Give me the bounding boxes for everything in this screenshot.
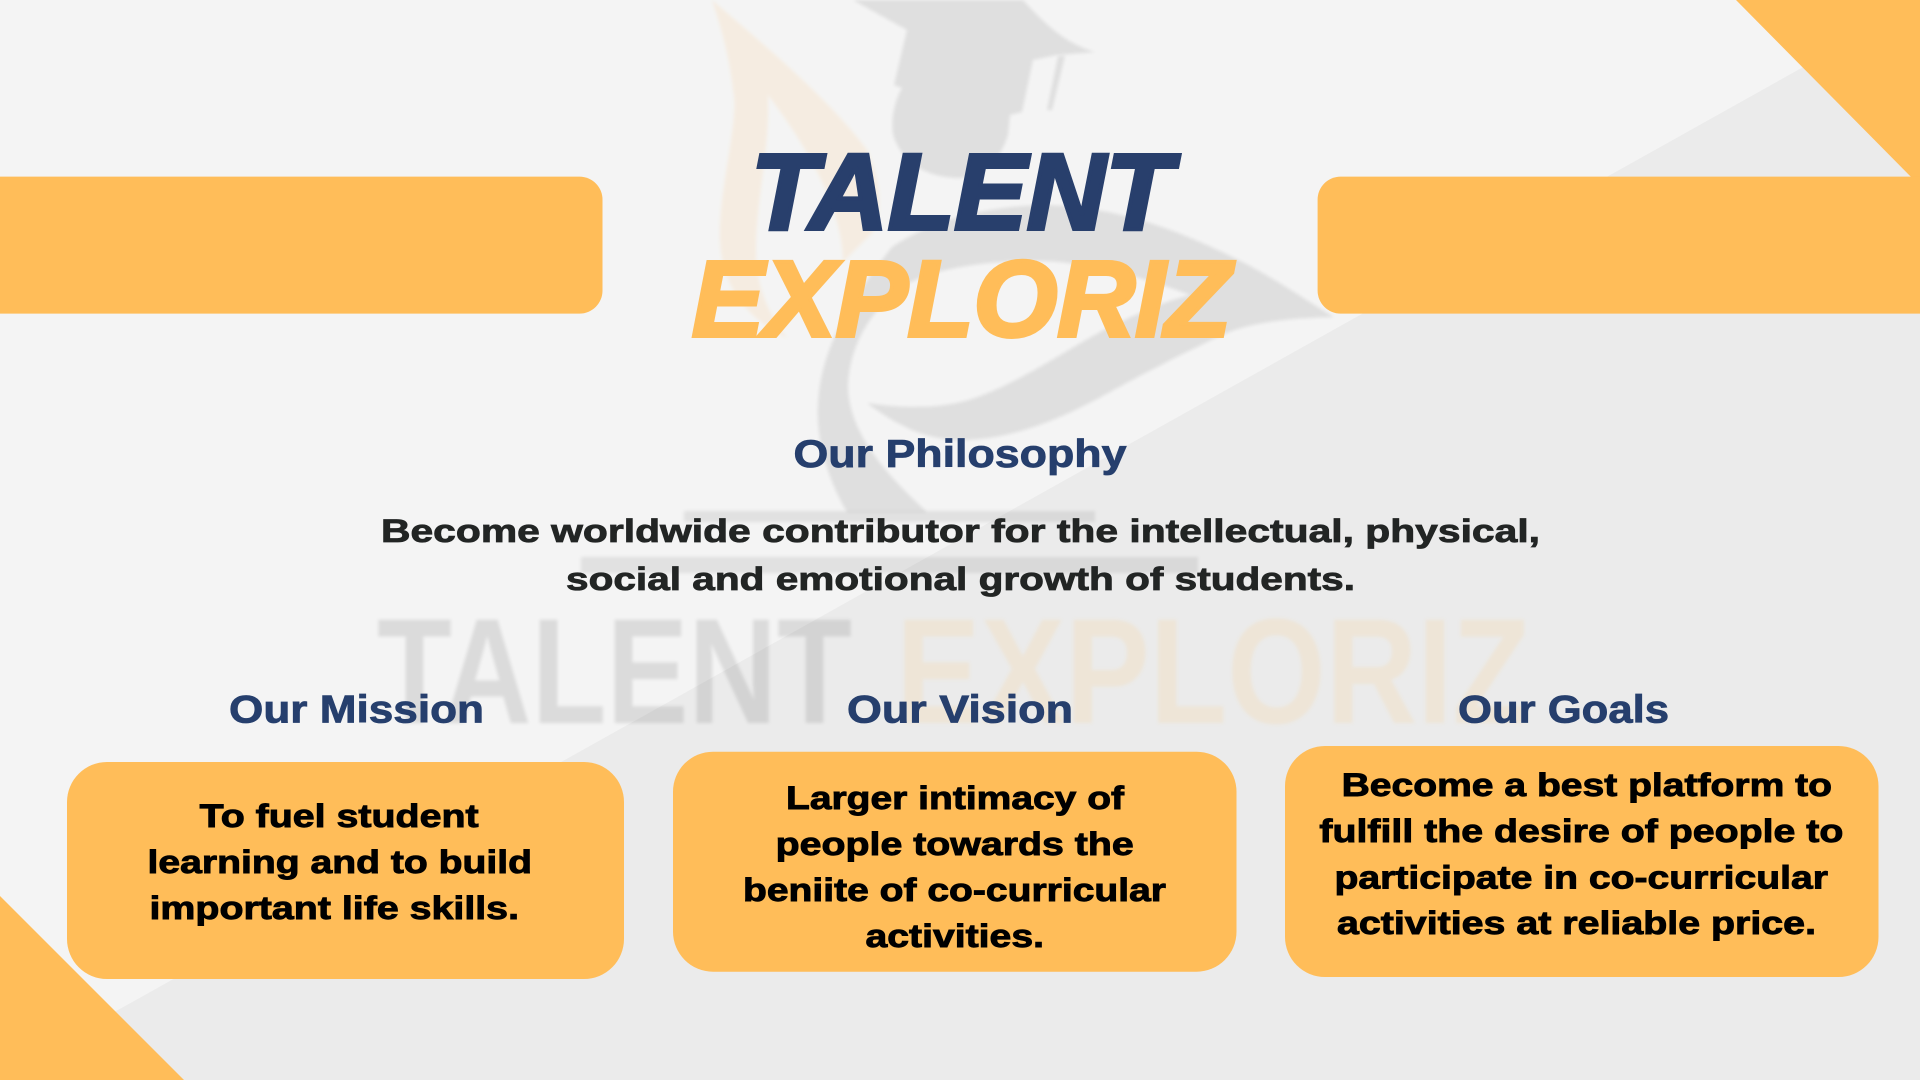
panel: mission card — [67, 762, 624, 979]
mission text: To fuel student — [200, 798, 479, 834]
watermark wordmark — [377, 587, 1530, 755]
mission text: learning and to build — [148, 844, 532, 880]
icon: watermark swoosh — [818, 205, 1334, 512]
heading: our mission: Our Mission — [229, 688, 484, 732]
watermark wordmark: TALENT — [377, 587, 852, 755]
goals text: participate in co-curricular — [1334, 860, 1828, 896]
right banner bar — [1318, 177, 1920, 314]
philosophy statement: Become worldwide contributor for the intellectual, physical, — [381, 513, 1540, 549]
philosophy statement — [381, 513, 1540, 597]
goals text: activities at reliable price. — [1337, 905, 1816, 941]
vision text: people towards the — [776, 826, 1134, 862]
vision text: Larger intimacy of — [786, 780, 1124, 816]
goals text — [1319, 767, 1843, 941]
mission text: important life skills. — [150, 890, 519, 926]
philosophy statement: social and emotional growth of students. — [566, 561, 1355, 597]
icon: watermark graduation cap — [853, 0, 1095, 178]
heading: our vision: Our Vision — [847, 688, 1073, 732]
watermark base bars — [581, 511, 1198, 573]
panel: goals card — [1285, 746, 1878, 977]
watermark wordmark: EXPLORIZ — [896, 587, 1530, 755]
title: EXPLORIZ — [692, 238, 1235, 359]
vision text: beniite of co-curricular — [743, 872, 1166, 908]
vision text — [743, 780, 1166, 954]
heading: our goals: Our Goals — [1458, 688, 1669, 732]
heading: our philosophy: Our Philosophy — [794, 433, 1127, 476]
goals text: Become a best platform to — [1342, 767, 1832, 803]
vision text: activities. — [866, 918, 1044, 954]
title: TALENT — [751, 131, 1180, 252]
panel: vision card — [673, 752, 1236, 972]
icon: watermark flame — [712, 0, 879, 338]
mission text — [148, 798, 532, 926]
watermark logo — [377, 0, 1530, 755]
goals text: fulfill the desire of people to — [1319, 813, 1843, 849]
left banner bar — [0, 177, 602, 314]
bottom left corner triangle — [0, 896, 184, 1080]
top right corner triangle — [1736, 0, 1920, 186]
title — [692, 131, 1235, 359]
